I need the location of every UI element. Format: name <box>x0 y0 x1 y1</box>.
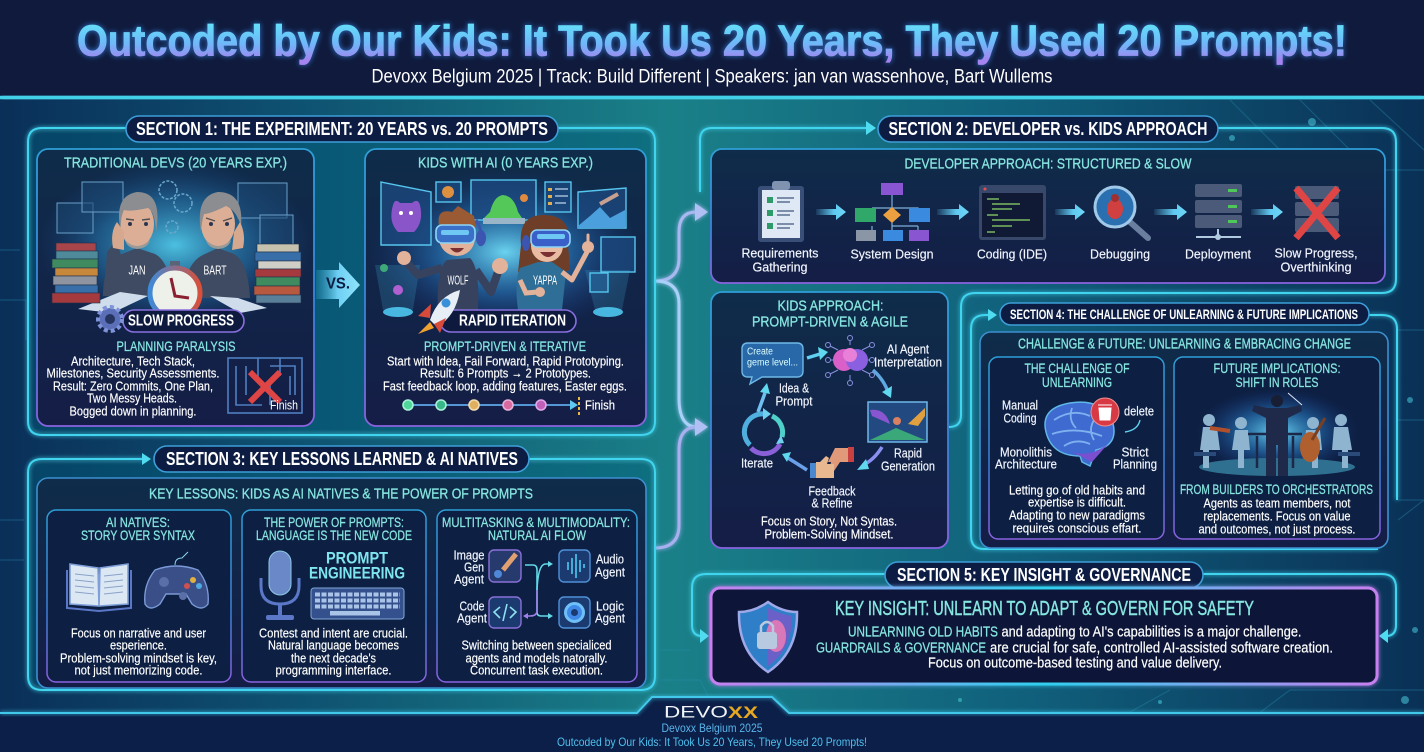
subpanel: challenge of unlearning <box>989 357 1164 539</box>
title: future implications: FUTURE IMPLICATIONS: <box>1214 360 1340 376</box>
text: multitasking details: Concurrent task execution. <box>470 662 603 678</box>
arrow <box>937 204 969 220</box>
rapid iteration badge <box>418 290 576 334</box>
subtitle: Devoxx Belgium 2025 | Track: Build Different | Speakers: jan van wassenhove, Bart Wullems <box>372 66 1052 88</box>
panel: traditional devs <box>37 149 314 426</box>
papers <box>78 292 267 313</box>
holographic screens <box>381 180 635 292</box>
connector arrows between sections <box>655 203 708 548</box>
timeline with milestones to finish <box>403 397 615 417</box>
icon: shield with lock <box>739 602 797 672</box>
section 5 heading <box>885 562 1203 588</box>
labels: agents: Agent <box>595 564 625 580</box>
footer event: Devoxx Belgium 2025 <box>662 721 763 735</box>
icon: thumbs feedback <box>810 447 854 478</box>
heading: traditional devs: TRADITIONAL DEVS (20 YEARS EXP.) <box>64 154 287 172</box>
text: iteration details: Result: 6 Prompts → 2 Prototypes. <box>420 366 591 380</box>
title: multitasking: NATURAL AI FLOW <box>488 527 587 543</box>
title: power of prompts: LANGUAGE IS THE NEW CODE <box>256 527 412 543</box>
text: AI natives details: Focus on narrative and user <box>71 626 207 640</box>
name: YAPPA: YAPPA <box>533 272 557 288</box>
illustration: conductor and robot orchestra <box>1194 388 1360 476</box>
text: insight line 2: are crucial for safe, controlled AI-assisted software creation. <box>990 640 1333 656</box>
books right <box>254 244 301 303</box>
text: iteration details <box>383 354 627 394</box>
section 2 frame <box>700 116 1396 427</box>
labels: agents: Code <box>460 598 484 614</box>
icon: iterate cycle <box>744 408 784 454</box>
labels: old habits: delete <box>1124 404 1154 418</box>
text: prompts details: the next decade's <box>291 650 376 666</box>
text: shift in roles details: replacements. Focus on value <box>1204 508 1350 524</box>
panel: key insight <box>711 588 1377 684</box>
icon: prompt speech bubble: Create <box>747 346 773 358</box>
title: challenge of unlearning: THE CHALLENGE OF <box>1024 360 1130 376</box>
icon: open book <box>67 564 131 611</box>
section 3 frame <box>28 446 655 690</box>
text: insight line 1: and adapting to AI's capabilities is a major challenge. <box>1002 624 1302 640</box>
icon: system design flowchart <box>855 183 930 241</box>
heading: developer approach: DEVELOPER APPROACH: STRUCTURED & SLOW <box>904 156 1192 172</box>
title: AI natives: AI NATIVES: <box>106 514 170 530</box>
icon: keyboard <box>311 588 404 619</box>
arrow <box>1154 204 1187 220</box>
labels: agents: Audio <box>596 552 624 566</box>
icon: logic agent <box>559 597 590 628</box>
labels: developer steps: Deployment <box>1185 246 1251 262</box>
icon: brain with delete button <box>1045 398 1140 466</box>
section 1 heading: SECTION 1: THE EXPERIMENT: 20 YEARS vs. 20 PROMPTS <box>136 119 548 139</box>
panel: kids approach <box>711 292 948 548</box>
labels: agile cycle steps: Interpretation <box>874 354 942 370</box>
text: planning details <box>46 354 220 418</box>
labels: agile cycle steps: Prompt <box>776 394 813 408</box>
title: AI natives <box>81 514 195 543</box>
labels: developer steps: Requirements <box>742 246 819 260</box>
labels: agents: Agent <box>457 610 487 626</box>
subpanel: future implications <box>1174 357 1380 539</box>
panel: kids with AI <box>365 149 646 426</box>
title: power of prompts <box>256 514 412 543</box>
icon: deployment servers <box>1195 184 1242 240</box>
text: kids summary: Problem-Solving Mindset. <box>764 526 894 542</box>
icon: clipboard requirements <box>758 181 804 242</box>
labels: agents: Logic <box>596 598 624 614</box>
agent flow arrows <box>523 561 553 619</box>
icon: code editor <box>979 185 1046 240</box>
section 2 heading <box>878 116 1218 142</box>
text: planning details: Two Messy Heads. <box>87 390 177 406</box>
icon: prompt speech bubble <box>742 343 803 384</box>
arrow <box>1055 204 1085 220</box>
labels: agents: Image <box>454 548 484 562</box>
text: insight line 3: Focus on outcome-based testing and value delivery. <box>928 654 1222 672</box>
heading: kids approach: PROMPT-DRIVEN & AGILE <box>752 314 908 330</box>
labels: agile cycle steps <box>741 342 942 510</box>
section 1 frame <box>28 116 655 435</box>
text: insight line 2: GUARDRAILS & GOVERNANCE <box>816 640 986 656</box>
text: shift in roles details <box>1198 496 1356 536</box>
icon: microphone <box>261 551 299 620</box>
subheading: prompt-driven: PROMPT-DRIVEN & ITERATIVE <box>424 338 586 354</box>
label: prompt engineering: ENGINEERING <box>309 564 405 582</box>
text: kids summary <box>761 514 897 542</box>
text: prompts details: Natural language becomes <box>268 638 399 652</box>
heading: kids with AI: KIDS WITH AI (0 YEARS EXP.) <box>418 154 593 172</box>
books left <box>52 243 100 303</box>
section 4 frame <box>971 303 1397 549</box>
slow progress badge <box>98 307 244 332</box>
section 2 heading: SECTION 2: DEVELOPER vs. KIDS APPROACH <box>888 119 1208 139</box>
heading: key insight: KEY INSIGHT: UNLEARN TO ADAPT & GOVERN FOR SAFETY <box>835 598 1254 620</box>
title: multitasking <box>442 514 630 543</box>
section 5 frame <box>692 562 1396 684</box>
icon: image gen agent <box>489 550 521 582</box>
title: challenge of unlearning <box>1024 360 1130 390</box>
labels: old habits: Coding <box>1004 410 1036 426</box>
labels: developer steps: Coding (IDE) <box>977 246 1047 262</box>
vs arrow <box>316 262 360 308</box>
labels: developer steps: Debugging <box>1090 246 1150 262</box>
name: BART: BART <box>204 262 227 278</box>
subpanel: multitasking <box>437 510 637 682</box>
text: unlearning details: Adapting to new paradigms <box>1009 508 1145 522</box>
footer band <box>0 697 1424 752</box>
slow progress badge: SLOW PROGRESS <box>128 312 234 330</box>
illustration: two developers with books and stopwatch <box>37 160 313 330</box>
name: WOLF: WOLF <box>448 272 469 288</box>
icon: audio agent <box>559 550 590 582</box>
heading: key lessons: KEY LESSONS: KIDS AS AI NATIVES & THE POWER OF PROMPTS <box>149 486 533 502</box>
labels: agile cycle steps: Feedback <box>808 484 856 498</box>
text: multitasking details <box>462 638 612 678</box>
arrow <box>816 204 846 220</box>
labels: old habits: Strict <box>1122 444 1149 460</box>
text: unlearning details: expertise is difficult. <box>1028 494 1126 510</box>
labels: agile cycle steps: Rapid <box>894 446 922 460</box>
labels: agile cycle steps: & Refine <box>812 496 852 510</box>
section 4 heading <box>1000 303 1369 325</box>
labels: developer steps: Slow Progress, <box>1274 246 1358 260</box>
arrow <box>1251 204 1283 220</box>
section 1 heading <box>126 116 558 142</box>
labels: old habits: Planning <box>1113 456 1157 472</box>
labels: developer steps <box>742 246 1358 274</box>
rapid iteration badge: RAPID ITERATION <box>459 312 566 330</box>
text: AI natives details: Problem-solving mindset is key, <box>60 650 217 666</box>
panel: developer approach <box>711 149 1385 283</box>
text: shift in roles details: and outcomes, not just process. <box>1198 522 1356 536</box>
text: multitasking details: Switching between specialiced <box>462 638 612 652</box>
icon: maze with red cross: Finish <box>270 398 298 412</box>
labels: old habits: Monolithis <box>1000 444 1052 460</box>
vs arrow: VS. <box>326 276 350 292</box>
title: multitasking: MULTITASKING & MULTIMODALITY: <box>442 514 630 530</box>
icon: magnifier with bug <box>1095 187 1148 238</box>
text: insight line 1 <box>848 624 1302 640</box>
timeline with milestones to finish: Finish <box>585 398 615 412</box>
text: planning details: Architecture, Tech Stack, <box>71 354 195 368</box>
subpanel: AI natives <box>47 510 231 682</box>
text: planning details: Milestones, Security Assessments. <box>46 366 220 380</box>
subheading: planning paralysis: PLANNING PARALYSIS <box>116 338 236 354</box>
boy <box>397 206 508 310</box>
logo: devoxx: DEVO XX <box>664 702 759 722</box>
heading: kids approach <box>752 298 908 330</box>
footer talk title: Outcoded by Our Kids: It Took Us 20 Years, They Used 20 Prompts! <box>557 735 867 749</box>
text: planning details: Result: Zero Commits, One Plan, <box>53 378 213 394</box>
section 3 heading <box>154 446 529 472</box>
labels: agents <box>454 548 625 626</box>
icon: prompt speech bubble: geme level... <box>747 358 798 368</box>
text: AI natives details: not just memorizing code. <box>74 662 202 678</box>
icon: generated game image <box>868 402 927 442</box>
text: insight line 1: UNLEARNING OLD HABITS <box>848 624 998 640</box>
illustration: kids with VR headsets and holographic screens <box>367 170 643 334</box>
labels: old habits: Manual <box>1002 398 1038 412</box>
text: shift in roles details: Agents as team members, not <box>1204 496 1351 510</box>
section 5 heading: SECTION 5: KEY INSIGHT & GOVERNANCE <box>897 565 1191 585</box>
label: prompt engineering: PROMPT <box>326 548 389 568</box>
title: AI natives: STORY OVER SYNTAX <box>81 527 195 543</box>
labels: agile cycle steps: Generation <box>881 458 935 474</box>
labels: agile cycle steps: Idea & <box>779 380 809 396</box>
text: iteration details: Fast feedback loop, adding features, Easter eggs. <box>383 378 627 394</box>
labels: old habits: Architecture <box>995 456 1057 472</box>
icon: crossed out servers <box>1295 186 1339 238</box>
text: prompts details <box>259 626 408 678</box>
header band <box>0 0 1424 99</box>
text: prompts details: programming interface. <box>276 662 392 678</box>
text: unlearning details: Letting go of old habits and <box>1009 482 1145 498</box>
name: JAN: JAN <box>128 262 146 278</box>
icon: AI brain <box>826 336 874 386</box>
man left <box>103 192 172 296</box>
girl <box>516 215 594 310</box>
text: planning details: Bogged down in planning. <box>70 404 196 418</box>
labels: developer steps: Gathering <box>752 260 808 274</box>
labels: agents: Agent <box>595 610 625 626</box>
text: unlearning details <box>1009 482 1145 536</box>
title: power of prompts: THE POWER OF PROMPTS: <box>264 514 404 530</box>
heading: kids approach: KIDS APPROACH: <box>778 298 884 314</box>
panel: key lessons <box>37 478 646 688</box>
text: kids summary: Focus on Story, Not Syntas. <box>761 514 897 528</box>
labels: old habits <box>995 398 1157 472</box>
icon: game controller <box>145 552 208 608</box>
text: insight line 2 <box>816 640 1333 656</box>
title: future implications: SHIFT IN ROLES <box>1236 374 1318 390</box>
title: future implications <box>1214 360 1340 390</box>
cycle arrows <box>758 347 892 470</box>
labels: agents: Gen <box>464 560 484 574</box>
text: prompts details: Contest and intent are crucial. <box>259 626 408 640</box>
platforms <box>375 264 630 317</box>
labels: agents: Agent <box>454 572 484 586</box>
text: iteration details: Start with Idea, Fail Forward, Rapid Prototyping. <box>387 354 624 368</box>
text: multitasking details: agents and models natorally. <box>466 650 608 666</box>
stopwatch <box>150 261 200 318</box>
labels: agile cycle steps: AI Agent <box>887 342 929 356</box>
man right <box>183 192 250 298</box>
labels: developer steps: System Design <box>850 246 934 262</box>
icon: maze with red cross <box>228 358 302 413</box>
subpanel: power of prompts <box>242 510 426 682</box>
section 3 heading: SECTION 3: KEY LESSONS LEARNED & AI NATIVES <box>166 449 518 469</box>
text: AI natives details <box>60 626 217 678</box>
icon: code agent <box>489 597 521 628</box>
title: challenge of unlearning: UNLEARNING <box>1042 374 1112 390</box>
text: AI natives details: esperience. <box>110 638 167 652</box>
labels: agile cycle steps: Iterate <box>741 456 773 470</box>
panel: challenge and future <box>980 332 1388 548</box>
label: prompt engineering <box>309 548 405 582</box>
labels: developer steps: Overthinking <box>1280 260 1352 274</box>
text: unlearning details: requires conscious effart. <box>1012 520 1142 536</box>
